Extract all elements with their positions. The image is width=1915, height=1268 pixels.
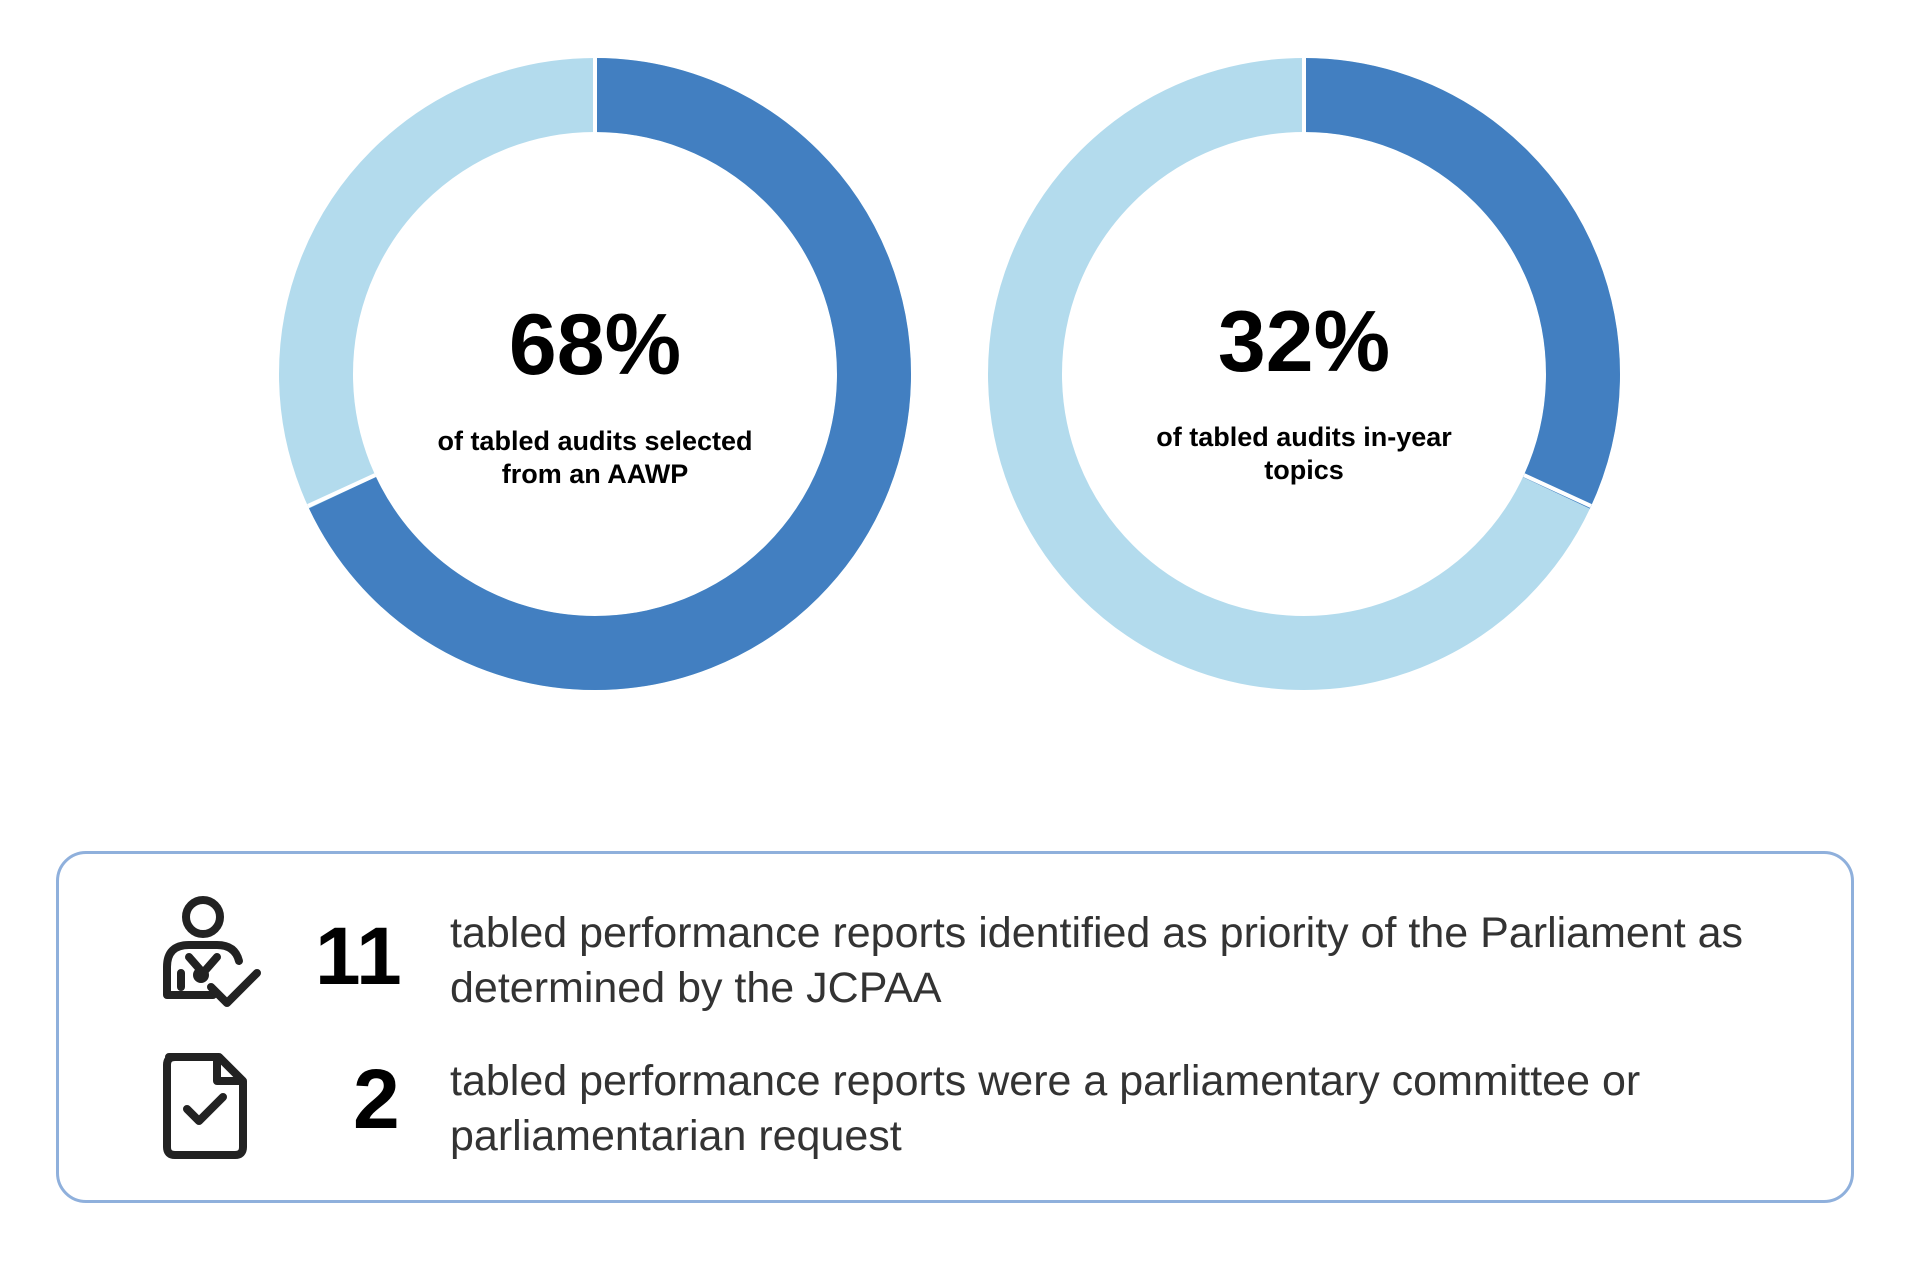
text: priority of the Parliament: tabled performance reports identified as priority of the Parliament as determined by the JCPAA: [450, 909, 1743, 1012]
icon: person with check: [163, 896, 261, 1007]
label: of tabled audits selected from an AAWP: [437, 426, 753, 489]
stat: 32%: 32%: [1218, 294, 1390, 390]
label: of tabled audits in-year topics: [1156, 422, 1452, 485]
stat: 11: 11: [315, 911, 402, 1002]
stat: 2: 2: [353, 1052, 400, 1146]
donut chart: 32% in-year topics: [988, 58, 1620, 690]
donut chart: 68% AAWP: [279, 58, 911, 690]
label: of tabled audits in-year topics: of tabled audits in-year: [1156, 422, 1452, 452]
label: of tabled audits in-year topics: topics: [1264, 455, 1344, 485]
stat: 68%: 68%: [509, 297, 681, 393]
label: of tabled audits selected from an AAWP: of tabled audits selected: [437, 426, 753, 456]
text: parliamentary committee request: tabled performance reports were a parliamentary committee or parliamentarian request: [450, 1057, 1640, 1160]
icon: document with check: [163, 1053, 247, 1159]
label: of tabled audits selected from an AAWP: from an AAWP: [502, 459, 688, 489]
panel: parliament priorities: [56, 851, 1854, 1203]
